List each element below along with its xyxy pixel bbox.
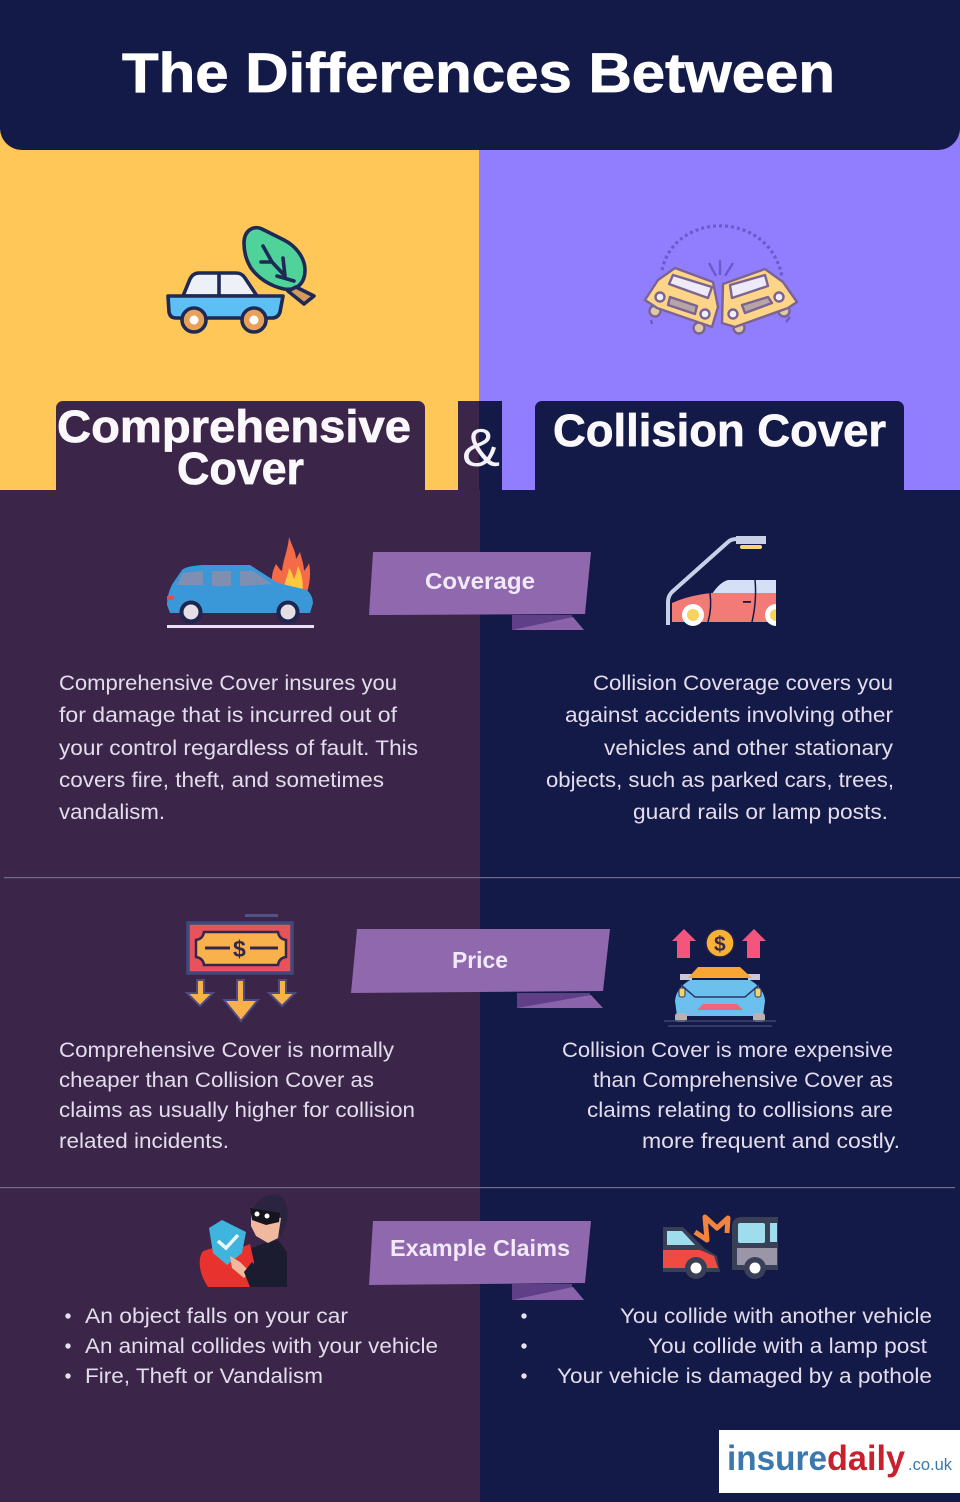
list: comprehensive example claims: Fire, Theft or Vandalism [85,1365,323,1388]
list: collision example claims [521,1305,932,1388]
icon: car hitting bus [663,1217,778,1279]
text: collision price: than Comprehensive Cover as [593,1069,893,1092]
text: comprehensive price [59,1039,415,1153]
left heading tab [56,401,425,494]
list: comprehensive example claims: An object falls on your car [85,1305,348,1328]
text: comprehensive coverage [59,672,418,824]
icon: falling price banknote [187,914,295,1021]
text: comprehensive coverage: vandalism. [59,801,165,824]
list: comprehensive example claims: An animal collides with your vehicle [85,1335,438,1358]
heading: collision cover: Collision Cover [553,405,886,456]
icon: car with leaf [168,228,314,332]
text: comprehensive coverage: your control regardless of fault. This [59,737,418,760]
icon: car and lamp post [668,536,776,626]
title banner [0,0,960,150]
ribbon: coverage [369,552,591,630]
text: collision coverage: guard rails or lamp posts. [633,801,888,824]
text: comprehensive price: claims as usually higher for collision [59,1099,415,1122]
text: comprehensive price: related incidents. [59,1130,229,1153]
text: comprehensive coverage: covers fire, theft, and sometimes [59,769,384,792]
heading: comprehensive cover: Comprehensive [57,401,411,452]
text: comprehensive coverage: for damage that is incurred out of [59,704,397,727]
text: comprehensive price: cheaper than Collision Cover as [59,1069,374,1092]
icon: rising price car [664,929,776,1026]
ampersand: & [462,418,500,478]
ampersand tab [458,401,502,490]
text: collision price: claims relating to collisions are [587,1099,893,1122]
text: collision price: more frequent and costly. [642,1130,900,1153]
logo: insuredaily [719,1430,960,1493]
text: comprehensive coverage: Comprehensive Cover insures you [59,672,397,695]
icon: falling price banknote: $ [233,936,246,962]
list: collision example claims: You collide with a lamp post [648,1335,927,1358]
logo: insuredaily: insure [727,1439,827,1478]
text: collision coverage [546,672,894,824]
icon: rising price car: $ [714,933,726,956]
icon: two cars colliding [645,226,797,334]
right heading tab [535,401,904,490]
text: collision coverage: objects, such as parked cars, trees, [546,769,894,792]
ribbon: example claims [369,1221,591,1300]
title: The Differences Between [122,41,835,104]
label: coverage: Coverage [425,568,535,594]
label: price: Price [452,947,508,973]
text: collision price [562,1039,900,1153]
text: collision coverage: Collision Coverage covers you [593,672,893,695]
list: comprehensive example claims [65,1305,438,1388]
logo: insuredaily: .co.uk [908,1455,952,1474]
panel: comprehensive background [0,130,480,1502]
text: collision coverage: against accidents involving other [565,704,893,727]
list: collision example claims: Your vehicle is damaged by a pothole [557,1365,932,1388]
text: collision price: Collision Cover is more expensive [562,1039,893,1062]
panel: collision background [479,130,960,1502]
icon: burning car [167,537,314,628]
icon: thief with shield [200,1195,288,1287]
ribbon: price [351,929,610,1008]
label: example claims: Example Claims [390,1235,570,1261]
text: comprehensive price: Comprehensive Cover is normally [59,1039,395,1062]
text: collision coverage: vehicles and other stationary [604,737,894,760]
left heading tab: Cover [177,443,304,494]
logo: insuredaily: daily [827,1439,906,1478]
list: collision example claims: You collide with another vehicle [620,1305,932,1328]
